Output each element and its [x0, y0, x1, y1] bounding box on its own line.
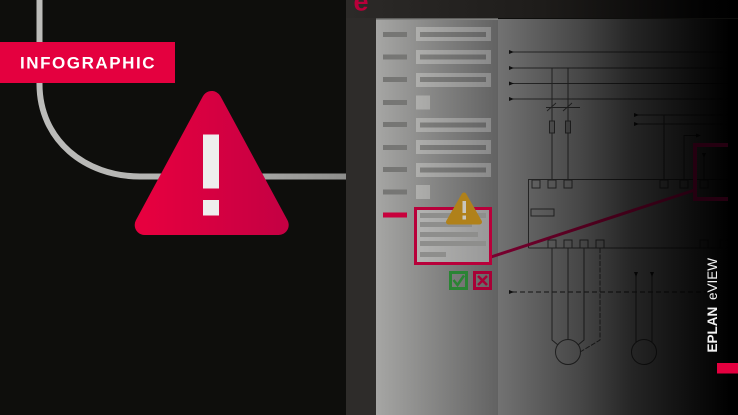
window title bar — [346, 0, 738, 18]
window sidebar — [346, 18, 376, 415]
icon: large red warning triangle — [145, 101, 279, 225]
icon: green check button — [450, 272, 466, 288]
badge: infographic — [0, 42, 175, 83]
badge label: INFOGRAPHIC — [20, 54, 156, 72]
active row marker — [383, 212, 407, 218]
highlighted component box — [695, 145, 730, 199]
brand red marker — [717, 363, 738, 374]
exclamation dot — [203, 200, 219, 216]
right fade overlay — [498, 19, 730, 415]
triangle shape — [145, 101, 279, 225]
title bar divider — [376, 18, 498, 20]
left dark panel — [0, 0, 346, 415]
warning text block — [416, 208, 490, 264]
exclamation bar — [203, 134, 219, 188]
vertical brand label: EPLAN eVIEW — [705, 258, 720, 352]
connector line — [40, 0, 346, 176]
electrical schematic — [509, 50, 738, 364]
schematic panel — [498, 19, 738, 415]
icon: amber warning triangle — [448, 195, 480, 222]
icon: red cross button — [474, 272, 490, 288]
form rows — [383, 27, 491, 199]
badge background — [0, 42, 175, 83]
right black edge — [728, 19, 738, 415]
form panel — [376, 20, 498, 415]
software window mockup — [346, 0, 738, 415]
connector to highlighted component — [491, 190, 695, 257]
